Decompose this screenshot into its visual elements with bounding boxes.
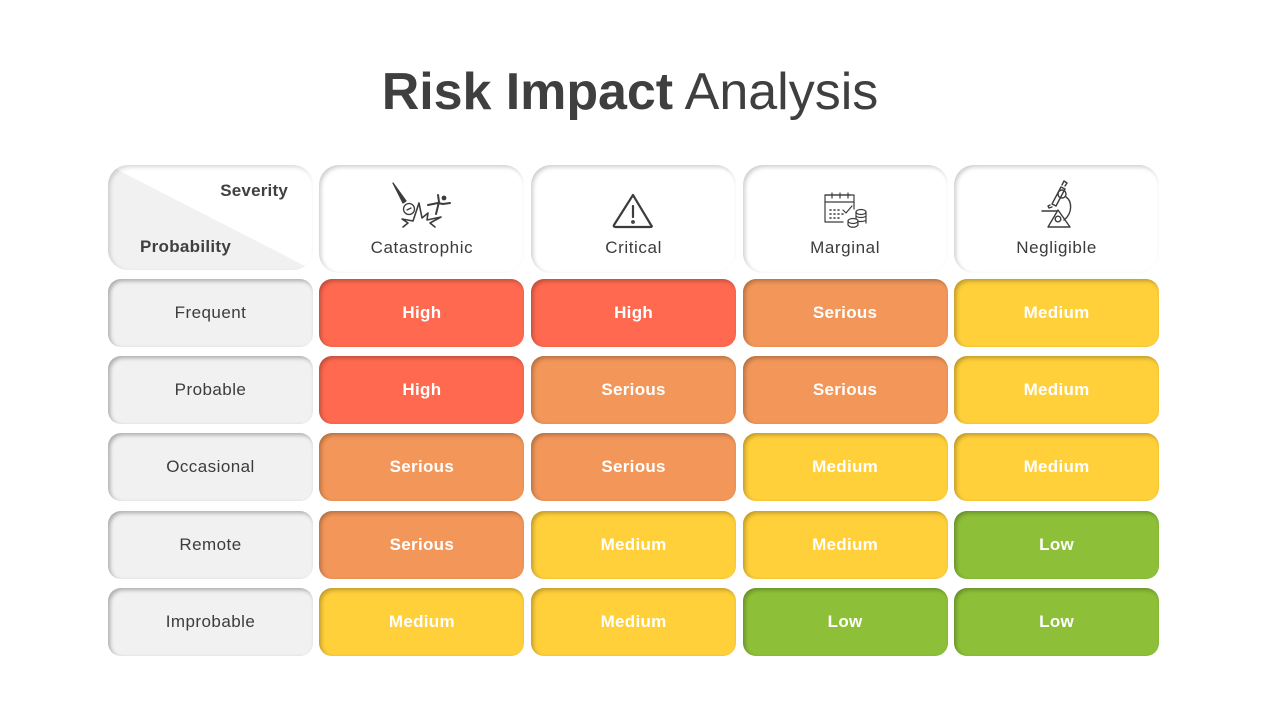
cell: Probable / Marginal xyxy=(742,356,948,424)
cell: Probable / Catastrophic: High xyxy=(402,380,441,399)
row: Probable: Probable xyxy=(175,380,246,399)
row: Frequent: Frequent xyxy=(175,303,246,322)
cell: Remote / Critical xyxy=(531,511,736,579)
column header: Critical xyxy=(531,165,736,273)
row: Improbable xyxy=(108,588,313,656)
cell: Remote / Critical: Medium xyxy=(601,535,667,554)
column header: Marginal: Marginal xyxy=(810,238,880,257)
panel: severity / probability corner header xyxy=(108,165,313,270)
cell: Occasional / Critical: Serious xyxy=(601,457,666,476)
cell: Probable / Negligible xyxy=(954,356,1159,424)
column header: Catastrophic xyxy=(319,165,524,273)
cell: Frequent / Marginal: Serious xyxy=(813,303,877,322)
cell: Improbable / Negligible: Low xyxy=(1039,612,1074,631)
cell: Occasional / Catastrophic: Serious xyxy=(390,457,454,476)
cell: Frequent / Negligible xyxy=(954,279,1159,347)
cell: Occasional / Marginal xyxy=(742,433,948,501)
icon: microscope xyxy=(1041,180,1072,228)
row: Remote: Remote xyxy=(179,535,242,554)
icon: calendar and coins xyxy=(824,192,867,228)
column header: Negligible: Negligible xyxy=(1016,238,1097,257)
cell: Improbable / Marginal xyxy=(742,588,948,656)
icon: warning triangle xyxy=(612,194,653,228)
cell: Occasional / Marginal: Medium xyxy=(812,457,878,476)
cell: Probable / Catastrophic xyxy=(319,356,524,424)
row: Occasional: Occasional xyxy=(166,457,255,476)
icon: falling rock and explosion xyxy=(392,182,451,228)
cell: Frequent / Negligible: Medium xyxy=(1024,303,1090,322)
row: Frequent xyxy=(108,279,313,347)
cell: Frequent / Critical xyxy=(531,279,736,347)
cell: Occasional / Catastrophic xyxy=(319,433,524,501)
cell: Improbable / Critical xyxy=(531,588,736,656)
cell: Improbable / Negligible xyxy=(954,588,1159,656)
panel: severity / probability corner header: Severity xyxy=(220,181,288,200)
column header: Catastrophic: Catastrophic xyxy=(371,238,473,257)
cell: Improbable / Critical: Medium xyxy=(601,612,667,631)
cell: Frequent / Catastrophic xyxy=(319,279,524,347)
column header: Critical: Critical xyxy=(605,238,662,257)
cell: Frequent / Catastrophic: High xyxy=(402,303,441,322)
cell: Probable / Negligible: Medium xyxy=(1024,380,1090,399)
cell: Frequent / Marginal xyxy=(742,279,948,347)
title: Risk Impact Analysis xyxy=(382,63,878,121)
cell: Frequent / Critical: High xyxy=(614,303,653,322)
row: Probable xyxy=(108,356,313,424)
row: Occasional xyxy=(108,433,313,501)
cell: Occasional / Negligible xyxy=(954,433,1159,501)
cell: Probable / Marginal: Serious xyxy=(813,380,877,399)
cell: Remote / Negligible: Low xyxy=(1039,535,1074,554)
cell: Probable / Critical xyxy=(531,356,736,424)
cell: Occasional / Critical xyxy=(531,433,736,501)
cell: Remote / Marginal: Medium xyxy=(812,535,878,554)
cell: Improbable / Marginal: Low xyxy=(828,612,863,631)
row: Remote xyxy=(108,511,313,579)
cell: Remote / Marginal xyxy=(742,511,948,579)
cell: Occasional / Negligible: Medium xyxy=(1024,457,1090,476)
column header: Marginal xyxy=(742,165,948,273)
cell: Improbable / Catastrophic xyxy=(319,588,524,656)
panel: severity / probability corner header: Probability xyxy=(140,237,231,256)
cell: Remote / Negligible xyxy=(954,511,1159,579)
row: Improbable: Improbable xyxy=(166,612,255,631)
cell: Remote / Catastrophic xyxy=(319,511,524,579)
cell: Improbable / Catastrophic: Medium xyxy=(389,612,455,631)
cell: Probable / Critical: Serious xyxy=(601,380,666,399)
column header: Negligible xyxy=(954,165,1159,273)
cell: Remote / Catastrophic: Serious xyxy=(390,535,454,554)
